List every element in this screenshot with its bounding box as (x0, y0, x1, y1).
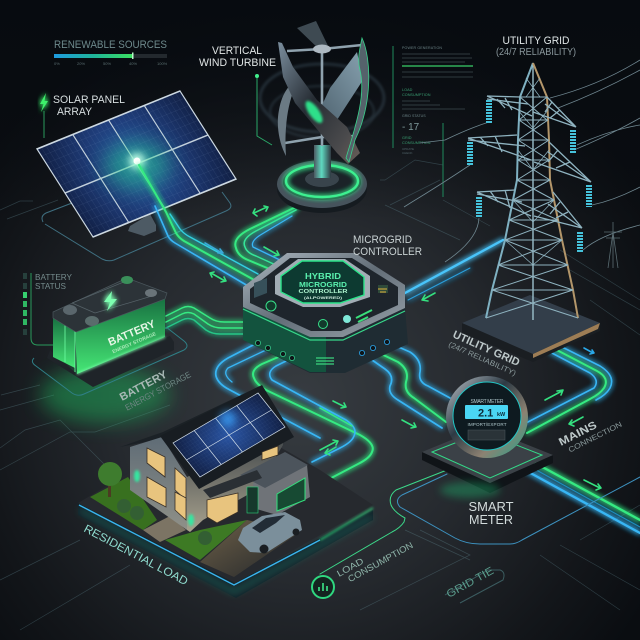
cable: turbine to controller (235, 205, 300, 270)
grid tie outlines (320, 470, 447, 574)
label: mains connection: MAINS (557, 419, 599, 449)
path (143, 516, 186, 542)
house roof (160, 385, 294, 489)
solar glint (105, 141, 169, 189)
renewable bar (54, 52, 167, 59)
renewable scale: 50% (103, 61, 111, 66)
label: utility grid rotated: (24/7 RELIABILITY) (447, 340, 518, 378)
battery platform outline (32, 327, 187, 395)
turbine right blade (346, 38, 369, 162)
porch roof (203, 470, 262, 498)
readout: grid consumption: CHECK (402, 151, 413, 155)
cable: meter to right edge (525, 463, 640, 533)
battery lid seam (72, 279, 152, 313)
label: utility grid top (496, 35, 576, 58)
cable: tower to meter (524, 347, 612, 433)
readout: grid status (402, 114, 426, 133)
battery face text: ENERGY STORAGE (112, 331, 158, 355)
label: utility grid top: (24/7 RELIABILITY) (496, 47, 576, 58)
controller side band (243, 306, 408, 373)
battery terminals (63, 276, 157, 326)
panel: hybrid microgrid controller (243, 253, 408, 373)
distant pylon (604, 222, 622, 268)
turbine pole and arms (285, 45, 362, 146)
label: utility grid rotated: UTILITY GRID (451, 329, 521, 369)
renewable scale (54, 61, 168, 66)
label: vertical wind turbine: WIND TURBINE (199, 57, 276, 69)
readout: load consumption: CONSUMPTION (402, 93, 431, 97)
garage (253, 465, 310, 515)
solar panel (37, 91, 236, 237)
house left wall (130, 437, 187, 530)
meter base outline (432, 432, 542, 478)
solar ground outline (42, 192, 231, 261)
icon: load gauge (312, 576, 334, 598)
turbine base (277, 145, 367, 213)
controller title: MICROGRID (299, 280, 348, 289)
battery lid (53, 278, 167, 332)
controller side trim (243, 309, 405, 340)
driveway (200, 520, 300, 577)
controller gauges (254, 278, 388, 328)
icon: battery bolt (104, 291, 117, 311)
controller green screen (281, 261, 364, 303)
label: mains connection: CONNECTION (567, 420, 623, 454)
label: load consumption: CONSUMPTION (346, 540, 415, 584)
readout: power generation (402, 46, 473, 77)
readout: grid status: GRID STATUS (402, 114, 426, 118)
label: residential load: RESIDENTIAL LOAD (82, 523, 190, 588)
meter ring (446, 376, 528, 458)
turbine front blade (278, 42, 360, 164)
garage door (277, 478, 305, 511)
label: battery status (23, 273, 73, 345)
controller title: (AI-POWERED) (304, 296, 343, 300)
label: smart meter (468, 500, 514, 527)
label: solar panel array: SOLAR PANEL (53, 94, 125, 106)
turbine hub (313, 44, 331, 54)
heading: renewable sources (54, 39, 168, 66)
meter face (453, 382, 521, 450)
label: load consumption (335, 531, 415, 587)
windows (147, 446, 278, 523)
heading: renewable sources: RENEWABLE SOURCES (54, 39, 167, 51)
house platform underside (78, 503, 373, 598)
controller title: CONTROLLER (298, 289, 348, 295)
panel: smart meter (422, 376, 553, 498)
label: vertical wind turbine: VERTICAL (212, 45, 262, 57)
meter reading: 2.1 (478, 408, 493, 420)
controller top face (250, 258, 398, 331)
controller vent (316, 358, 334, 364)
controller bezel (275, 259, 370, 307)
tower lattice (468, 63, 591, 320)
readout: grid consumption (402, 136, 431, 155)
renewable scale: 40% (129, 61, 137, 66)
label: battery status: STATUS (35, 282, 66, 291)
renewable scale: 20% (77, 61, 85, 66)
controller green side (243, 306, 326, 372)
label: vertical wind turbine (199, 45, 276, 145)
flow arrows (205, 206, 601, 490)
turbine blade glow (302, 98, 326, 126)
label: microgrid controller: MICROGRID (353, 234, 412, 246)
thin blueprint lines (0, 160, 640, 630)
tree (98, 462, 122, 497)
battery base (47, 336, 174, 387)
house platform edge light (79, 505, 320, 585)
cable: solar to controller (139, 165, 258, 286)
turbine swirl (260, 64, 384, 138)
house platform top (78, 430, 373, 583)
cable: controller to house (216, 343, 373, 486)
house front wall (187, 430, 283, 532)
renewable scale: 100% (157, 61, 168, 66)
cable: controller to meter (362, 342, 450, 428)
turbine rear blades (297, 21, 330, 52)
solar stand (128, 214, 156, 236)
label: battery status: BATTERY (35, 273, 73, 282)
meter display (465, 405, 508, 419)
battery glow reflection (40, 367, 170, 423)
meter base reflection (440, 482, 500, 498)
door (247, 487, 258, 513)
panel: house residential load (78, 385, 373, 598)
readout: grid consumption: CONSUMPTION (402, 141, 431, 145)
readout: grid status: - 17 (402, 122, 420, 133)
meter unit: kW (497, 412, 506, 418)
car (238, 512, 302, 554)
panel: utility grid tower (404, 60, 640, 362)
panel: battery (32, 276, 187, 423)
controller title (298, 272, 348, 300)
bushes (117, 499, 212, 545)
label: battery energy storage: ENERGY STORAGE (123, 369, 193, 412)
lawn (90, 477, 157, 530)
label: battery energy storage: BATTERY (118, 368, 170, 404)
battery body (53, 297, 165, 374)
readout: load consumption: LOAD (402, 88, 413, 92)
insulators (470, 100, 589, 253)
label: microgrid controller (353, 234, 422, 258)
readout: grid consumption: GRID (402, 136, 412, 140)
wall lights (134, 470, 194, 526)
data readout column (393, 46, 443, 197)
label: smart meter: METER (469, 513, 513, 527)
controller rim (243, 253, 405, 337)
icon: solar bolt (40, 93, 48, 112)
readout: grid consumption: UPDATE (402, 147, 414, 151)
cables: power flows (139, 165, 640, 574)
controller title: HYBRID (305, 272, 341, 281)
roof solar panels (173, 393, 285, 477)
battery face text: BATTERY (106, 318, 158, 349)
status level bars (23, 273, 27, 335)
controller ports (255, 339, 390, 361)
label: load consumption: LOAD (335, 556, 366, 579)
panel: solar array (37, 91, 236, 261)
front lawn (165, 520, 247, 560)
label: solar panel array: ARRAY (57, 106, 93, 118)
meter base (422, 452, 553, 493)
garage roof (240, 452, 308, 488)
label: grid tie: GRID TIE (445, 565, 496, 601)
label: utility grid top: UTILITY GRID (502, 35, 570, 47)
roof glint (220, 411, 236, 427)
label: microgrid controller: CONTROLLER (353, 246, 422, 258)
readout: power generation: POWER GENERATION (402, 46, 442, 50)
leader line (257, 76, 272, 145)
house platform glow (80, 510, 372, 592)
label: mains connection (557, 409, 623, 457)
meter label: SMART METER (470, 399, 504, 405)
panel: vertical wind turbine (260, 21, 384, 213)
meter import export: IMPORT/EXPORT (468, 422, 507, 427)
renewable scale: 0% (54, 61, 60, 66)
cable: grid tie blue (405, 240, 503, 300)
power lines (404, 60, 640, 262)
meter lower display (468, 430, 505, 440)
cable: battery to controller (166, 306, 244, 334)
readout: load consumption (402, 88, 465, 109)
tower base platform (462, 295, 600, 362)
label: solar panel array (40, 93, 125, 138)
panel: data readouts (393, 46, 473, 197)
house left roof (120, 385, 262, 447)
label: smart meter: SMART (468, 500, 514, 514)
